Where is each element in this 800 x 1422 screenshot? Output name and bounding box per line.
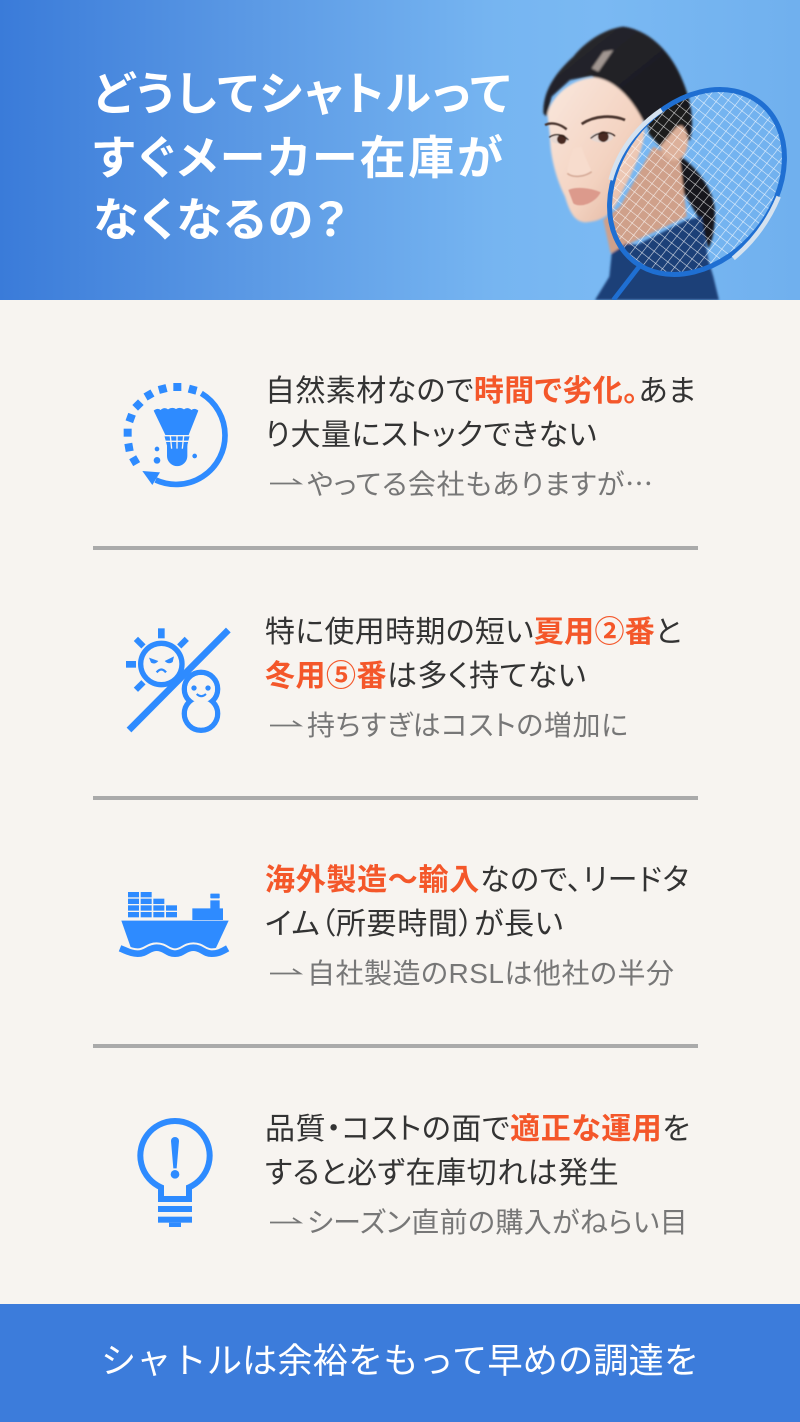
item 2 text — [265, 616, 682, 741]
item 1 icon: shuttlecock with time arrow — [124, 383, 228, 488]
item 2 text: 特に使用時期の短い夏用②番と — [265, 616, 682, 649]
item 3 text: 海外製造〜輸入なので、リードタ — [265, 864, 690, 897]
item 3 icon: container ship — [118, 892, 230, 957]
title — [93, 68, 512, 246]
item 4 text: すると必ず在庫切れは発生 — [265, 1157, 619, 1190]
item 3 text: イム（所要時間）が長い — [265, 908, 564, 941]
racket frame — [573, 55, 800, 309]
footer message: シャトルは余裕をもって早めの調達を — [101, 1342, 699, 1381]
hair — [543, 27, 692, 147]
item 1 text — [265, 375, 696, 503]
item 4 text: シーズン直前の購入がねらい目 — [307, 1207, 688, 1238]
item 1 text: り大量にストックできない — [265, 419, 597, 452]
item 1 text: やってる会社もありますが… — [307, 463, 654, 503]
face — [547, 77, 644, 222]
racket strings — [612, 92, 782, 272]
item 4 icon: light bulb with exclamation — [137, 1118, 213, 1227]
title: なくなるの？ — [93, 194, 349, 246]
shirt — [595, 217, 719, 300]
photo: woman with badminton racket — [542, 25, 787, 300]
facial features — [545, 117, 625, 205]
footer banner — [0, 1304, 800, 1422]
ponytail — [677, 153, 715, 248]
title: どうしてシャトルって — [93, 68, 512, 120]
arrow — [270, 968, 303, 974]
item 1 text: 自然素材なので時間で劣化。あま — [265, 375, 696, 408]
item 3 text — [265, 864, 690, 989]
item 2 text: 持ちすぎはコストの増加に — [307, 710, 629, 741]
header banner — [0, 0, 800, 300]
item 2 icon: sun and snowman with slash — [126, 628, 231, 733]
neck — [603, 147, 687, 253]
arrow — [270, 720, 303, 726]
arrow — [270, 478, 303, 484]
arrow — [270, 1217, 303, 1224]
item 3 text: 自社製造のRSLは他社の半分 — [307, 958, 674, 989]
item 2 text: 冬用⑤番は多く持てない — [265, 660, 586, 693]
ear — [660, 122, 688, 161]
title: すぐメーカー在庫が — [93, 132, 505, 184]
item 4 text: 品質・コストの面で適正な運用を — [265, 1113, 691, 1146]
item 4 text — [265, 1113, 691, 1238]
